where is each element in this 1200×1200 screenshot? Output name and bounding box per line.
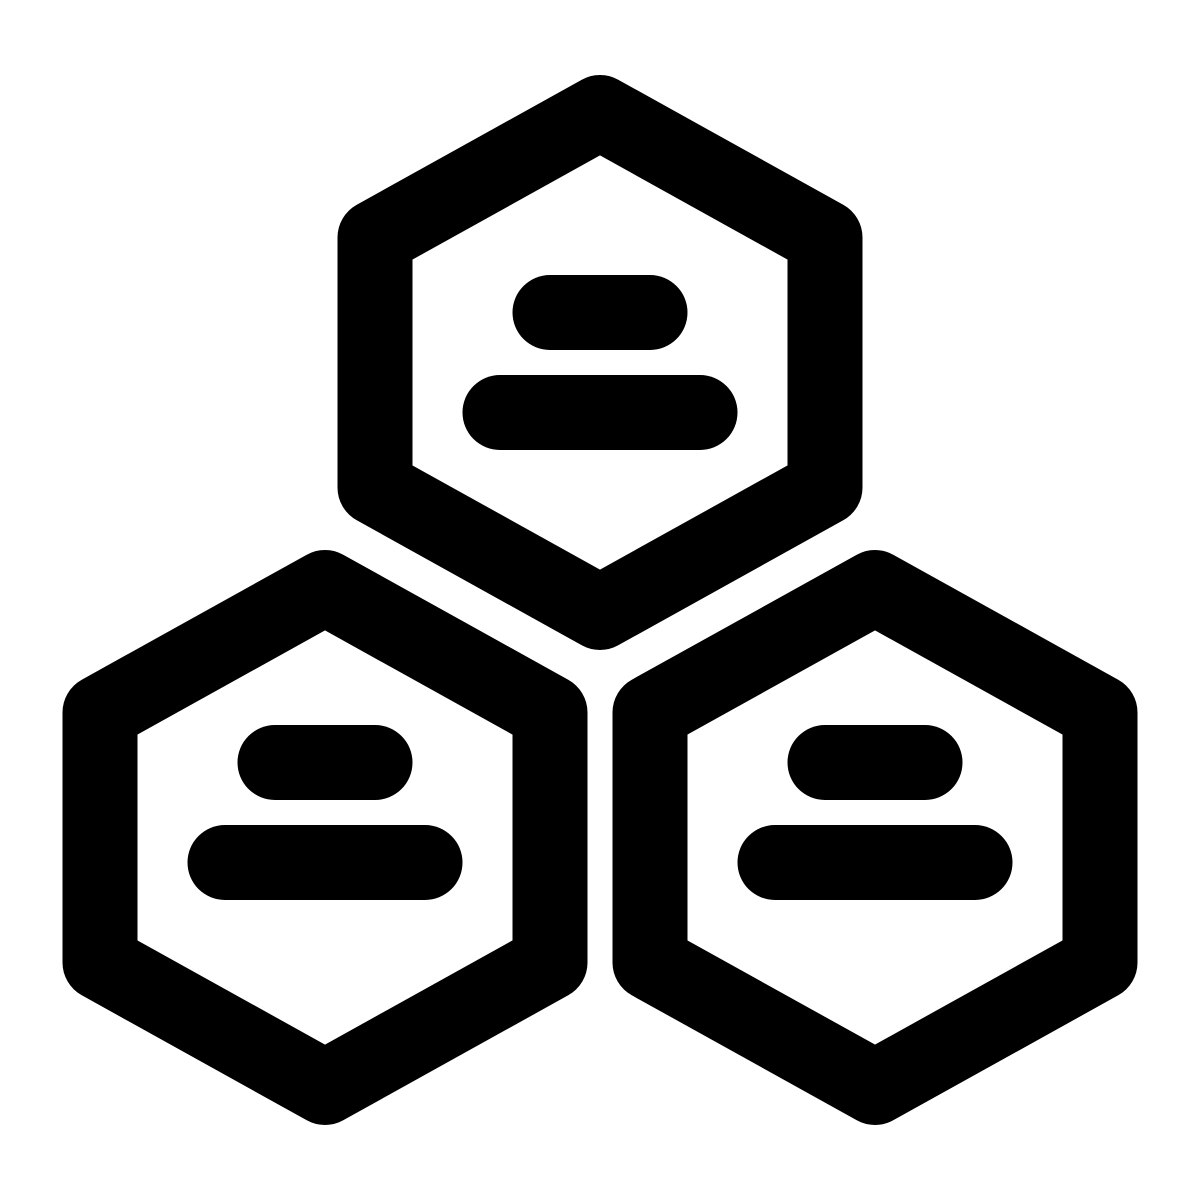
top hexagon cell <box>375 112 825 612</box>
bottom-right hexagon short bar <box>825 725 925 800</box>
bottom-left hexagon long bar <box>225 825 425 900</box>
bottom-left hexagon cell <box>100 588 550 1088</box>
bottom-right hexagon outline <box>650 588 1100 1088</box>
top hexagon long bar <box>500 375 700 450</box>
bottom-right hexagon cell <box>650 588 1100 1088</box>
top hexagon short bar <box>550 275 650 350</box>
top hexagon outline <box>375 112 825 612</box>
bottom-left hexagon short bar <box>275 725 375 800</box>
bottom-right hexagon long bar <box>775 825 975 900</box>
bottom-left hexagon outline <box>100 588 550 1088</box>
